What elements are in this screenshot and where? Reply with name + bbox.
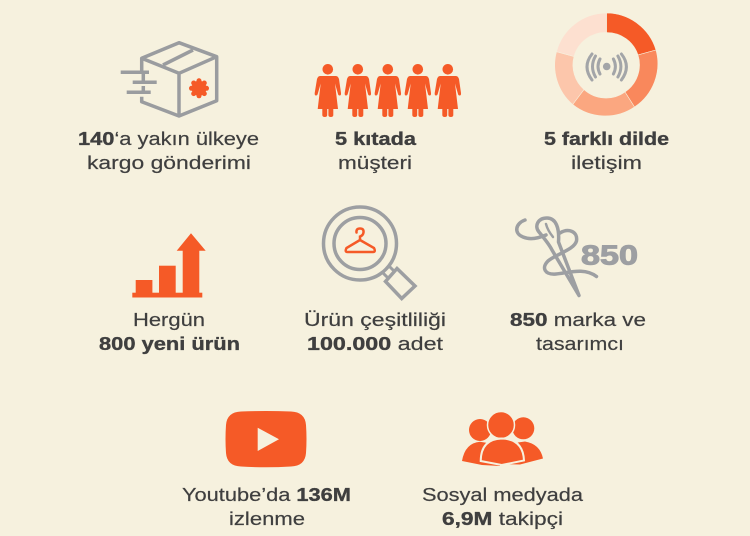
text: product range [304, 309, 446, 354]
text: languages: iletişim [571, 152, 642, 173]
icon: cargo box [121, 43, 217, 116]
text: social [422, 484, 584, 529]
text: languages [544, 128, 669, 173]
icon: needle and thread [517, 218, 638, 296]
text: cargo: kargo gönderimi [87, 152, 251, 173]
text: new products [99, 309, 240, 354]
text: 850 badge: 850 [581, 240, 638, 270]
text: brands: tasarımcı [536, 333, 624, 354]
icon: cargo star [189, 78, 209, 98]
text: social: 6,9M takipçi [442, 508, 563, 529]
icon: signal waves [587, 54, 626, 80]
icon: five figures [315, 64, 461, 117]
text: social: Sosyal medyada [422, 484, 584, 505]
text: product range: Ürün çeşitliliği [304, 309, 446, 330]
text: youtube: Youtube’da 136M [182, 484, 351, 505]
text: youtube: izlenme [229, 508, 305, 529]
text: continents [335, 128, 417, 173]
icon: people group [462, 412, 543, 466]
icon: youtube [226, 411, 306, 467]
text: cargo: 140 ‘a yakın ülkeye [78, 128, 259, 149]
icon: hanger [346, 228, 375, 252]
text: new products: 800 yeni ürün [99, 333, 240, 354]
text: brands [510, 309, 646, 354]
text: languages: 5 farklı dilde [544, 128, 669, 149]
text: continents: 5 kıtada [335, 128, 417, 149]
text: product range: 100.000 adet [307, 333, 443, 354]
text: new products: Hergün [133, 309, 205, 330]
text: youtube [182, 484, 351, 529]
icon: magnifier with hanger [324, 207, 415, 298]
text: brands: 850 marka ve [510, 309, 646, 330]
chart: language donut [555, 13, 658, 116]
text: cargo [78, 128, 259, 173]
text: continents: müşteri [338, 152, 412, 173]
icon: rising bars [132, 233, 206, 298]
